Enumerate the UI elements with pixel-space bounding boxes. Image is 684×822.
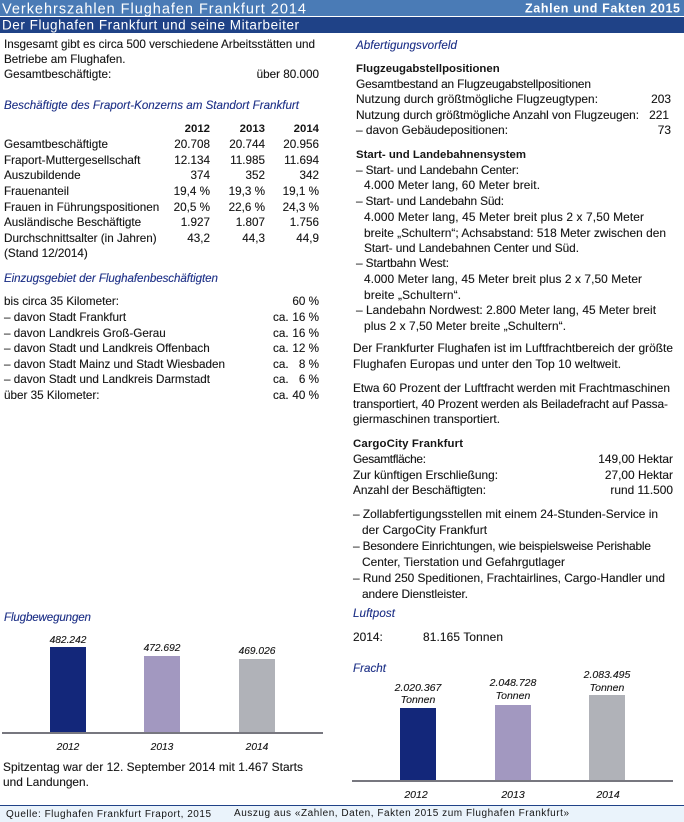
CargoCity bullet list xyxy=(353,507,665,601)
runway system: 4.000 Meter lang, 60 Meter breit. xyxy=(364,178,540,192)
bar chart: flight movements: 469.026 xyxy=(239,646,276,657)
text: freight share: transportiert, 40 Prozent werden als Beiladefracht auf Passa- xyxy=(353,397,668,411)
table: Fraport employees: Frauenanteil xyxy=(4,185,69,198)
CargoCity facts: Gesamtfläche: xyxy=(353,452,426,466)
runway system: breite „Schultern“. xyxy=(364,288,461,302)
note: peak day xyxy=(3,760,303,789)
footer bar xyxy=(0,805,684,822)
CargoCity bullet list: – Zollabfertigungsstellen mit einem 24-Stunden-Service in xyxy=(353,507,658,521)
table: Fraport employees xyxy=(4,123,320,260)
runway system: Start- und Landebahnen Center und Süd. xyxy=(364,241,579,255)
table: Fraport employees: 19,4 % xyxy=(174,185,210,198)
table: catchment area: 8 % xyxy=(299,358,319,371)
table: Fraport employees: 43,2 xyxy=(187,232,210,245)
table: Fraport employees: (Stand 12/2014) xyxy=(4,247,88,260)
table: catchment area: 40 % xyxy=(292,389,319,402)
table: Fraport employees: 19,1 % xyxy=(283,185,319,198)
table: Fraport employees: 352 xyxy=(245,169,265,182)
heading: catchment area: Einzugsgebiet der Flughafenbeschäftigten xyxy=(4,272,218,285)
table: catchment area: ca. xyxy=(273,389,289,402)
bar chart: freight: Tonnen xyxy=(590,682,624,694)
table: Fraport employees: 342 xyxy=(299,169,319,182)
table: catchment area: ca. xyxy=(273,373,289,386)
table: Fraport employees: 44,9 xyxy=(296,232,319,245)
table: catchment area: – davon Stadt und Landkreis Offenbach xyxy=(4,342,210,355)
table: Fraport employees: 374 xyxy=(190,169,210,182)
table: Fraport employees: 44,3 xyxy=(242,232,265,245)
intro text: Betriebe am Flughafen. xyxy=(4,53,126,66)
table: Fraport employees: 20.956 xyxy=(283,138,319,151)
table: catchment area: ca. xyxy=(273,327,289,340)
aircraft stands xyxy=(356,63,671,137)
bar chart: freight: 2.083.495 xyxy=(583,669,631,681)
aircraft stands: Nutzung durch größtmögliche Flugzeugtypen: xyxy=(356,92,598,106)
runway system: plus 2 x 7,50 Meter breite „Schultern“. xyxy=(364,319,566,333)
aircraft stands: 203 xyxy=(651,92,671,106)
runway system: breite „Schultern“; Achsabstand: 518 Meter zwischen den xyxy=(364,226,666,240)
source: Quelle: Flughafen Frankfurt Fraport, 2015 xyxy=(6,809,211,820)
CargoCity facts: rund 11.500 xyxy=(610,483,673,497)
text: freight share xyxy=(353,381,670,426)
bar chart: flight movements: 482.242 xyxy=(50,635,87,646)
table: Fraport employees: 19,3 % xyxy=(229,185,265,198)
runway system: 4.000 Meter lang, 45 Meter breit plus 2 x 7,50 Meter xyxy=(364,272,642,286)
table: Fraport employees: Auszubildende xyxy=(4,169,81,182)
bar chart: flight movements: 2014 xyxy=(245,742,269,753)
CargoCity bullet list: – Rund 250 Speditionen, Frachtairlines, Cargo-Handler und xyxy=(353,571,665,585)
table: Fraport employees: 11.694 xyxy=(284,154,319,167)
air mail value xyxy=(353,630,503,644)
aircraft stands: Gesamtbestand an Flugzeugabstellpositionen xyxy=(356,77,591,91)
table: Fraport employees: Durchschnittsalter (in Jahren) xyxy=(4,232,157,245)
CargoCity bullet list: andere Dienstleister. xyxy=(362,587,468,601)
intro text: über 80.000 xyxy=(257,68,319,81)
bar chart: freight: Tonnen xyxy=(401,694,435,706)
table: catchment area: ca. xyxy=(273,358,289,371)
CargoCity facts: Anzahl der Beschäftigten: xyxy=(353,483,486,497)
excerpt note: Auszug aus «Zahlen, Daten, Fakten 2015 zum Flughafen Frankfurt» xyxy=(234,808,569,819)
CargoCity bullet list: – Besondere Einrichtungen, wie beispielsweise Perishable xyxy=(353,539,651,553)
bar chart: flight movements: 2012 xyxy=(56,742,80,753)
text: air freight rank xyxy=(353,341,673,371)
aircraft stands: – davon Gebäudepositionen: xyxy=(356,123,508,137)
text: freight share: giermaschinen transportiert. xyxy=(353,412,500,426)
table: catchment area: – davon Landkreis Groß-Gerau xyxy=(4,327,166,340)
intro text xyxy=(4,38,319,81)
CargoCity bullet list: der CargoCity Frankfurt xyxy=(362,523,488,537)
heading: apron: Abfertigungsvorfeld xyxy=(355,39,458,52)
table: Fraport employees: Gesamtbeschäftigte xyxy=(4,138,108,151)
intro text: Insgesamt gibt es circa 500 verschiedene Arbeitsstätten und xyxy=(4,38,315,51)
aircraft stands: 221 xyxy=(649,108,669,122)
table: Fraport employees: 11.985 xyxy=(230,154,265,167)
CargoCity facts: CargoCity Frankfurt xyxy=(353,438,463,450)
aircraft stands: 73 xyxy=(658,123,671,137)
table: Fraport employees: 2012 xyxy=(185,123,210,135)
bar chart: freight: 2.048.728 xyxy=(489,677,537,689)
table: Fraport employees: Fraport-Muttergesellschaft xyxy=(4,154,141,167)
table: catchment area: – davon Stadt und Landkreis Darmstadt xyxy=(4,373,211,386)
CargoCity facts: Zur künftigen Erschließung: xyxy=(353,468,498,482)
CargoCity bullet list: Center, Tierstation und Gefahrgutlager xyxy=(362,555,565,569)
intro text: Gesamtbeschäftigte: xyxy=(4,68,111,81)
table: Fraport employees: 20.708 xyxy=(174,138,210,151)
note: peak day: Spitzentag war der 12. September 2014 mit 1.467 Starts xyxy=(3,760,303,774)
section title bar xyxy=(0,17,684,33)
air mail value: 2014: xyxy=(353,630,383,644)
bar chart: freight: 2014 xyxy=(595,789,620,801)
bar chart: freight: 2.020.367 xyxy=(394,682,443,694)
table: catchment area: bis circa 35 Kilometer: xyxy=(4,295,119,308)
CargoCity facts: 149,00 Hektar xyxy=(598,452,673,466)
table: Fraport employees: 2013 xyxy=(240,123,265,135)
runway system: – Landebahn Nordwest: 2.800 Meter lang, 45 Meter breit xyxy=(356,303,657,317)
aircraft stands: Nutzung durch größtmögliche Anzahl von Flugzeugen: xyxy=(356,108,639,122)
runway system: – Start- und Landebahn Center: xyxy=(356,163,519,177)
table: catchment area: über 35 Kilometer: xyxy=(4,389,100,402)
CargoCity facts: 27,00 Hektar xyxy=(605,468,673,482)
bar chart: flight movements: 2013 xyxy=(150,742,174,753)
table: catchment area: 12 % xyxy=(292,342,319,355)
text: freight share: Etwa 60 Prozent der Luftfracht werden mit Frachtmaschinen xyxy=(353,381,670,395)
runway system: 4.000 Meter lang, 45 Meter breit plus 2 x 7,50 Meter xyxy=(364,210,644,224)
text: air freight rank: Der Frankfurter Flughafen ist im Luftfrachtbereich der größte xyxy=(353,341,673,355)
air mail value: 81.165 Tonnen xyxy=(423,630,503,644)
runway system: – Startbahn West: xyxy=(356,256,449,270)
table: Fraport employees: 24,3 % xyxy=(283,201,319,214)
table: Fraport employees: 20.744 xyxy=(229,138,265,151)
main title: Verkehrszahlen Flughafen Frankfurt 2014 xyxy=(2,2,306,18)
table: Fraport employees: 1.927 xyxy=(181,216,210,229)
table: Fraport employees: 1.756 xyxy=(290,216,319,229)
bar chart: flight movements: 472.692 xyxy=(144,643,181,654)
table: Fraport employees: 20,5 % xyxy=(174,201,210,214)
aircraft stands: Flugzeugabstellpositionen xyxy=(356,63,500,75)
table: catchment area: – davon Stadt Frankfurt xyxy=(4,311,127,324)
header band xyxy=(0,0,684,18)
CargoCity facts xyxy=(353,438,673,497)
bar chart: freight: 2012 xyxy=(403,789,428,801)
text: air freight rank: Flughafen Europas und unter den Top 10 weltweit. xyxy=(353,357,621,371)
table: catchment area xyxy=(4,295,319,402)
section title bar: Der Flughafen Frankfurt und seine Mitarbeiter xyxy=(2,18,300,32)
heading: freight: Fracht xyxy=(353,662,387,675)
table: Fraport employees: 2014 xyxy=(294,123,320,135)
note: peak day: und Landungen. xyxy=(3,775,89,789)
edition label: Zahlen und Fakten 2015 xyxy=(525,2,680,16)
runway system: – Start- und Landebahn Süd: xyxy=(356,194,504,208)
table: Fraport employees: 12.134 xyxy=(174,154,210,167)
table: catchment area: 16 % xyxy=(292,327,319,340)
bar chart: freight: 2013 xyxy=(500,789,525,801)
table: Fraport employees: 22,6 % xyxy=(229,201,265,214)
table: catchment area: 16 % xyxy=(292,311,319,324)
heading: air mail: Luftpost xyxy=(353,607,396,620)
bar chart: flight movements xyxy=(2,635,323,753)
table: catchment area: 6 % xyxy=(299,373,319,386)
bar chart: freight: Tonnen xyxy=(496,690,530,702)
table: Fraport employees: 1.807 xyxy=(236,216,265,229)
heading: Fraport employees: Beschäftigte des Fraport-Konzerns am Standort Frankfurt xyxy=(4,99,300,112)
table: catchment area: ca. xyxy=(273,342,289,355)
runway system: Start- und Landebahnensystem xyxy=(356,149,526,161)
table: catchment area: 60 % xyxy=(292,295,319,308)
heading: flight movements: Flugbewegungen xyxy=(4,611,91,624)
table: Fraport employees: Ausländische Beschäftigte xyxy=(4,216,141,229)
table: catchment area: ca. xyxy=(273,311,289,324)
bar chart: freight xyxy=(352,669,673,801)
table: Fraport employees: Frauen in Führungspositionen xyxy=(4,201,159,214)
table: catchment area: – davon Stadt Mainz und Stadt Wiesbaden xyxy=(4,358,225,371)
runway system xyxy=(356,149,666,333)
